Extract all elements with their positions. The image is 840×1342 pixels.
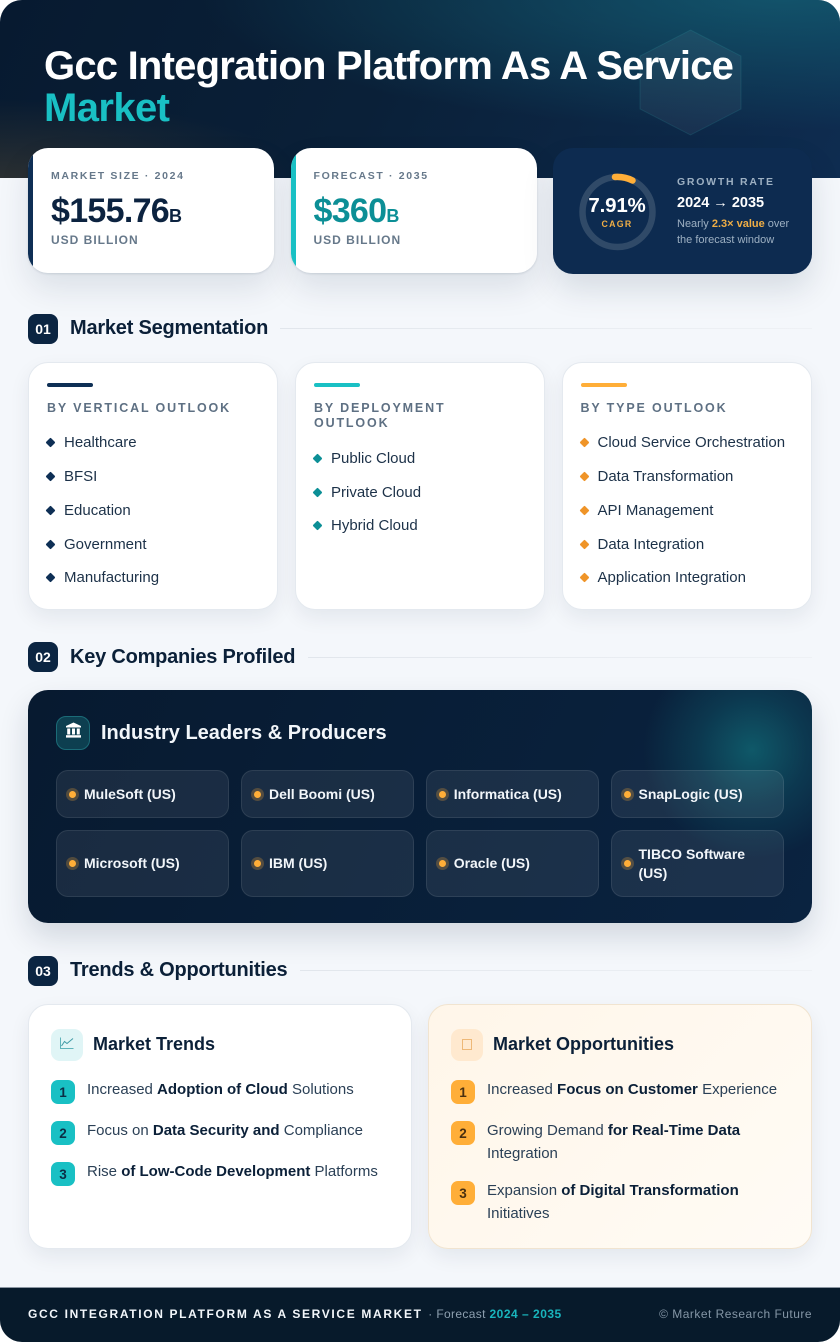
panel: by vertical outlook: Government xyxy=(64,536,147,553)
company: MuleSoft xyxy=(56,770,229,818)
company: SnapLogic xyxy=(610,770,784,818)
title xyxy=(44,44,733,130)
section heading 01 xyxy=(28,314,58,344)
growth rate card: the forecast window xyxy=(677,234,774,246)
company: SnapLogic: SnapLogic (US) xyxy=(638,786,743,802)
panel: market trends: Focus on Data Security and Compliance xyxy=(87,1122,363,1139)
panel: by type outlook: Application Integration xyxy=(598,569,746,586)
panel: industry leaders xyxy=(28,690,812,923)
company: Oracle xyxy=(426,830,599,897)
stat card shadows xyxy=(28,148,274,273)
company: Microsoft xyxy=(56,830,229,897)
opportunity 1: 1 xyxy=(459,1085,467,1100)
panel: market opportunities: Increased Focus on Customer Experience xyxy=(487,1081,777,1098)
title: Gcc Integration Platform As A Service xyxy=(44,44,733,88)
company: TIBCO Software: (US) xyxy=(638,865,667,881)
panel: by type outlook: Cloud Service Orchestration xyxy=(598,434,785,451)
company: Informatica xyxy=(426,770,599,818)
trend 2: 2 xyxy=(59,1126,67,1141)
stat card: market size: $155.76B xyxy=(51,192,182,230)
company: Microsoft: Microsoft (US) xyxy=(84,855,180,871)
section heading 03 xyxy=(28,956,58,986)
company: Oracle: Oracle (US) xyxy=(454,855,530,871)
panel: by type outlook: Data Integration xyxy=(598,536,704,553)
icon: opportunity xyxy=(451,1029,483,1061)
company: Informatica: Informatica (US) xyxy=(454,786,562,802)
footer credit: © Market Research Future xyxy=(659,1307,812,1321)
panel: by deployment outlook: Hybrid Cloud xyxy=(331,517,418,534)
panel: by vertical outlook: BY VERTICAL OUTLOOK xyxy=(47,401,231,415)
text: Key Companies Profiled xyxy=(70,646,295,668)
trend 3 xyxy=(51,1162,75,1186)
section heading 02 xyxy=(28,642,58,672)
growth rate card: 2024 → 2035 xyxy=(677,195,764,211)
trend 1 xyxy=(51,1080,75,1104)
company: IBM: IBM (US) xyxy=(269,855,327,871)
panel: by vertical outlook xyxy=(28,362,278,610)
opportunity 3 xyxy=(451,1181,475,1205)
panel: market trends xyxy=(28,1004,412,1249)
company: Dell Boomi: Dell Boomi (US) xyxy=(269,786,375,802)
growth rate card: GROWTH RATE xyxy=(677,176,775,188)
panel: by type outlook: BY TYPE OUTLOOK xyxy=(580,401,727,415)
company: Dell Boomi xyxy=(241,770,414,818)
stat card: forecast: FORECAST · 2035 xyxy=(314,170,429,182)
company: TIBCO Software: TIBCO Software xyxy=(638,846,745,862)
opportunity 2: 2 xyxy=(459,1126,467,1141)
growth rate card: Nearly 2.3× value over xyxy=(677,218,789,230)
section heading 01: 01 xyxy=(35,321,51,337)
panel: by deployment outlook: BY DEPLOYMENT xyxy=(314,401,445,415)
section heading 03: 03 xyxy=(35,963,51,979)
decorative hexagon xyxy=(640,30,742,136)
footer title: GCC INTEGRATION PLATFORM AS A SERVICE MARKET · Forecast 2024 – 2035 xyxy=(28,1307,562,1321)
growth rate card xyxy=(553,148,812,274)
trend 2 xyxy=(51,1121,75,1145)
panel: by deployment outlook xyxy=(295,362,545,610)
growth rate card: 7.91% xyxy=(588,194,646,217)
panel: by vertical outlook: Manufacturing xyxy=(64,569,159,586)
panel: by vertical outlook: Education xyxy=(64,502,131,519)
panel: by type outlook: API Management xyxy=(598,502,713,519)
panel: market trends: Increased Adoption of Cloud Solutions xyxy=(87,1081,354,1098)
panel: market trends: Rise of Low-Code Development Platforms xyxy=(87,1163,378,1180)
stat card: market size: USD BILLION xyxy=(51,233,139,247)
panel heading: Market Opportunities xyxy=(493,1034,674,1054)
text: Trends & Opportunities xyxy=(70,959,287,981)
stat card: forecast: $360B xyxy=(314,192,399,230)
company: MuleSoft: MuleSoft (US) xyxy=(84,786,176,802)
text: Market Segmentation xyxy=(70,317,268,339)
panel: by deployment outlook: Private Cloud xyxy=(331,484,421,501)
footer xyxy=(0,1288,840,1342)
panel: market opportunities: Growing Demand for Real-Time Data xyxy=(487,1122,740,1139)
stat card: market size: MARKET SIZE · 2024 xyxy=(51,170,185,182)
growth rate card: CAGR xyxy=(601,219,633,229)
panel: market opportunities: Initiatives xyxy=(487,1205,550,1222)
panel heading: Industry Leaders & Producers xyxy=(101,722,387,744)
company: TIBCO Software xyxy=(610,830,784,897)
opportunity 3: 3 xyxy=(459,1186,467,1201)
title: Market xyxy=(44,86,169,130)
panel: market opportunities xyxy=(428,1004,812,1249)
trend 3: 3 xyxy=(59,1167,67,1182)
opportunity 2 xyxy=(451,1121,475,1145)
panel: by deployment outlook: OUTLOOK xyxy=(314,416,389,430)
header banner xyxy=(0,0,840,178)
stat card: market size xyxy=(28,148,274,273)
stat card: forecast: USD BILLION xyxy=(314,233,401,247)
icon: chart xyxy=(51,1029,83,1061)
opportunity 1 xyxy=(451,1080,475,1104)
section heading 02: 02 xyxy=(35,649,51,665)
CAGR ring xyxy=(579,174,656,250)
panel: by vertical outlook: Healthcare xyxy=(64,434,137,451)
stat card: forecast xyxy=(291,148,537,273)
panel: by type outlook xyxy=(562,362,812,610)
panel: by type outlook: Data Transformation xyxy=(598,468,733,485)
panel heading: Market Trends xyxy=(93,1034,215,1054)
company: IBM xyxy=(241,830,414,897)
icon: institution xyxy=(56,716,90,750)
trend 1: 1 xyxy=(59,1085,67,1100)
panel: by vertical outlook: BFSI xyxy=(64,468,97,485)
panel: market opportunities: Integration xyxy=(487,1145,558,1162)
panel: by deployment outlook: Public Cloud xyxy=(331,450,415,467)
panel: market opportunities: Expansion of Digital Transformation xyxy=(487,1182,739,1199)
